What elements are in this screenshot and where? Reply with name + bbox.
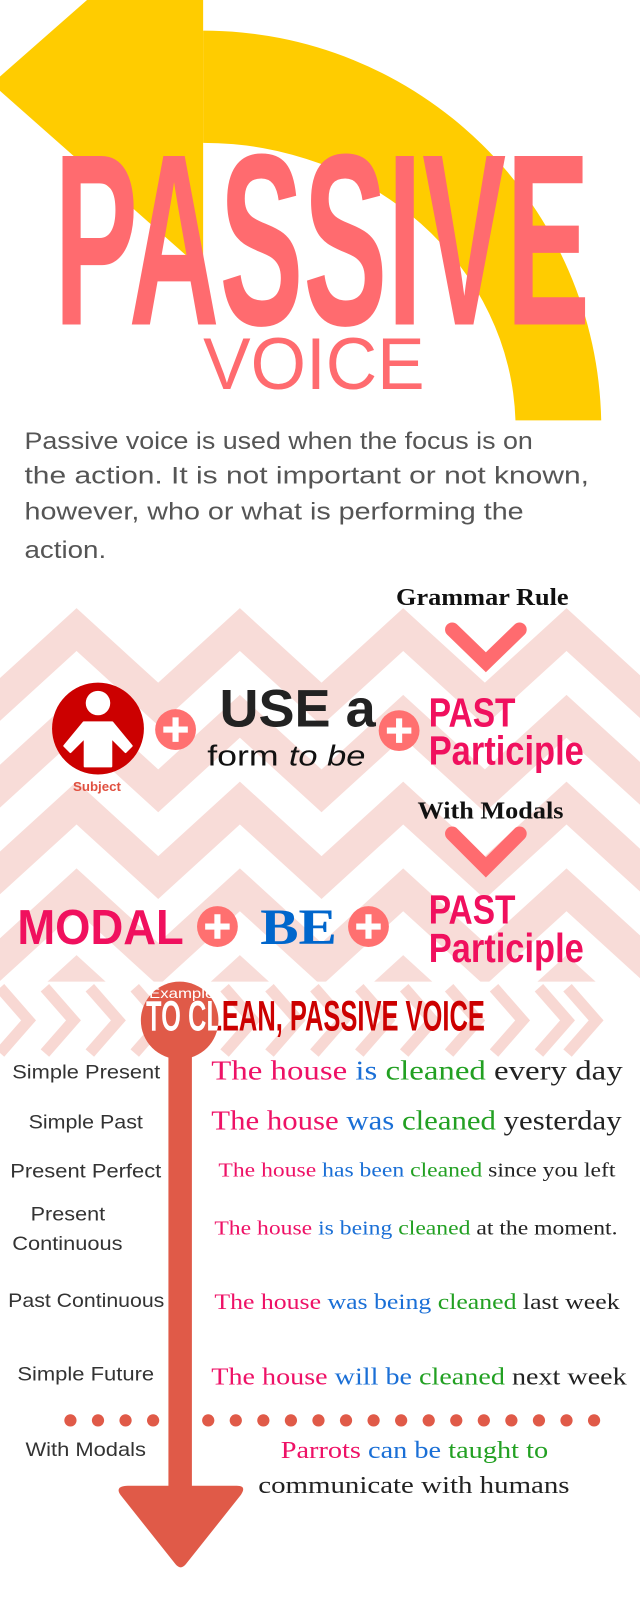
sentences: examples: The house was cleaned yesterday bbox=[211, 1105, 622, 1136]
arrow: timeline down arrow bbox=[119, 982, 243, 1567]
icon: plus 2 bbox=[379, 710, 420, 751]
icon: chevron down 1 bbox=[452, 630, 520, 662]
text: USE a form to be bbox=[207, 680, 376, 772]
icon: subject person bbox=[52, 683, 144, 794]
text: USE a form to be: form bbox=[207, 740, 279, 772]
labels: tenses: Simple Past bbox=[29, 1112, 144, 1134]
labels: tenses: Simple Present bbox=[12, 1062, 161, 1084]
labels: tenses: Past Continuous bbox=[8, 1290, 164, 1312]
text block: definition: however, who or what is performing the bbox=[24, 498, 524, 525]
icon: chevron down 2 bbox=[452, 834, 520, 867]
text: USE a form to be: USE a bbox=[219, 680, 376, 739]
labels: tenses: Present bbox=[31, 1203, 106, 1225]
icon: yellow curved arrow bbox=[0, 0, 601, 420]
text: PAST Participle 1: PAST bbox=[429, 690, 516, 736]
text: MODAL: MODAL bbox=[17, 901, 184, 955]
icon: subject person: Subject bbox=[73, 779, 121, 794]
icon: plus 3 bbox=[197, 906, 238, 947]
text block: definition: action. bbox=[24, 537, 106, 564]
sentences: examples: The house was being cleaned last week bbox=[214, 1289, 620, 1314]
heading: Grammar Rule: Grammar Rule bbox=[396, 584, 569, 611]
text: USE a form to be: to be bbox=[289, 740, 365, 772]
text: PAST Participle 1: Participle bbox=[429, 727, 584, 773]
text: PAST Participle 2: Participle bbox=[429, 925, 584, 971]
text block: definition: Passive voice is used when the focus is on bbox=[24, 428, 533, 455]
sentences: examples: The house is being cleaned at the moment. bbox=[214, 1218, 618, 1240]
text: PAST Participle 2 bbox=[429, 886, 584, 971]
heading: With Modals: With Modals bbox=[417, 797, 563, 824]
labels: tenses: With Modals bbox=[26, 1439, 146, 1461]
icon: plus 4 bbox=[348, 906, 389, 947]
sentences: examples: The house has been cleaned since you left bbox=[218, 1160, 616, 1182]
labels: tenses bbox=[8, 1062, 164, 1461]
labels: tenses: Continuous bbox=[12, 1233, 122, 1255]
text: PAST Participle 2: PAST bbox=[429, 886, 516, 932]
dotted divider bbox=[64, 1414, 600, 1427]
heading: Example TO CLEAN, PASSIVE VOICE: Example bbox=[149, 986, 214, 1002]
text: BE: BE bbox=[260, 900, 337, 956]
sentences: examples bbox=[211, 1055, 628, 1499]
sentences: examples: The house is cleaned every day bbox=[211, 1055, 623, 1086]
text: PAST Participle 1 bbox=[429, 690, 584, 773]
sentences: examples: Parrots can be taught to bbox=[281, 1437, 548, 1464]
text block: definition bbox=[24, 428, 589, 564]
icon: plus 1 bbox=[155, 709, 196, 750]
sentences: examples: communicate with humans bbox=[258, 1472, 570, 1499]
labels: tenses: Present Perfect bbox=[10, 1161, 162, 1183]
sentences: examples: The house will be cleaned next week bbox=[211, 1364, 628, 1391]
subtitle: VOICE: VOICE bbox=[203, 322, 425, 405]
labels: tenses: Simple Future bbox=[17, 1364, 154, 1386]
text block: definition: the action. It is not important or not known, bbox=[24, 463, 589, 490]
heading: Example TO CLEAN, PASSIVE VOICE bbox=[146, 988, 484, 1037]
